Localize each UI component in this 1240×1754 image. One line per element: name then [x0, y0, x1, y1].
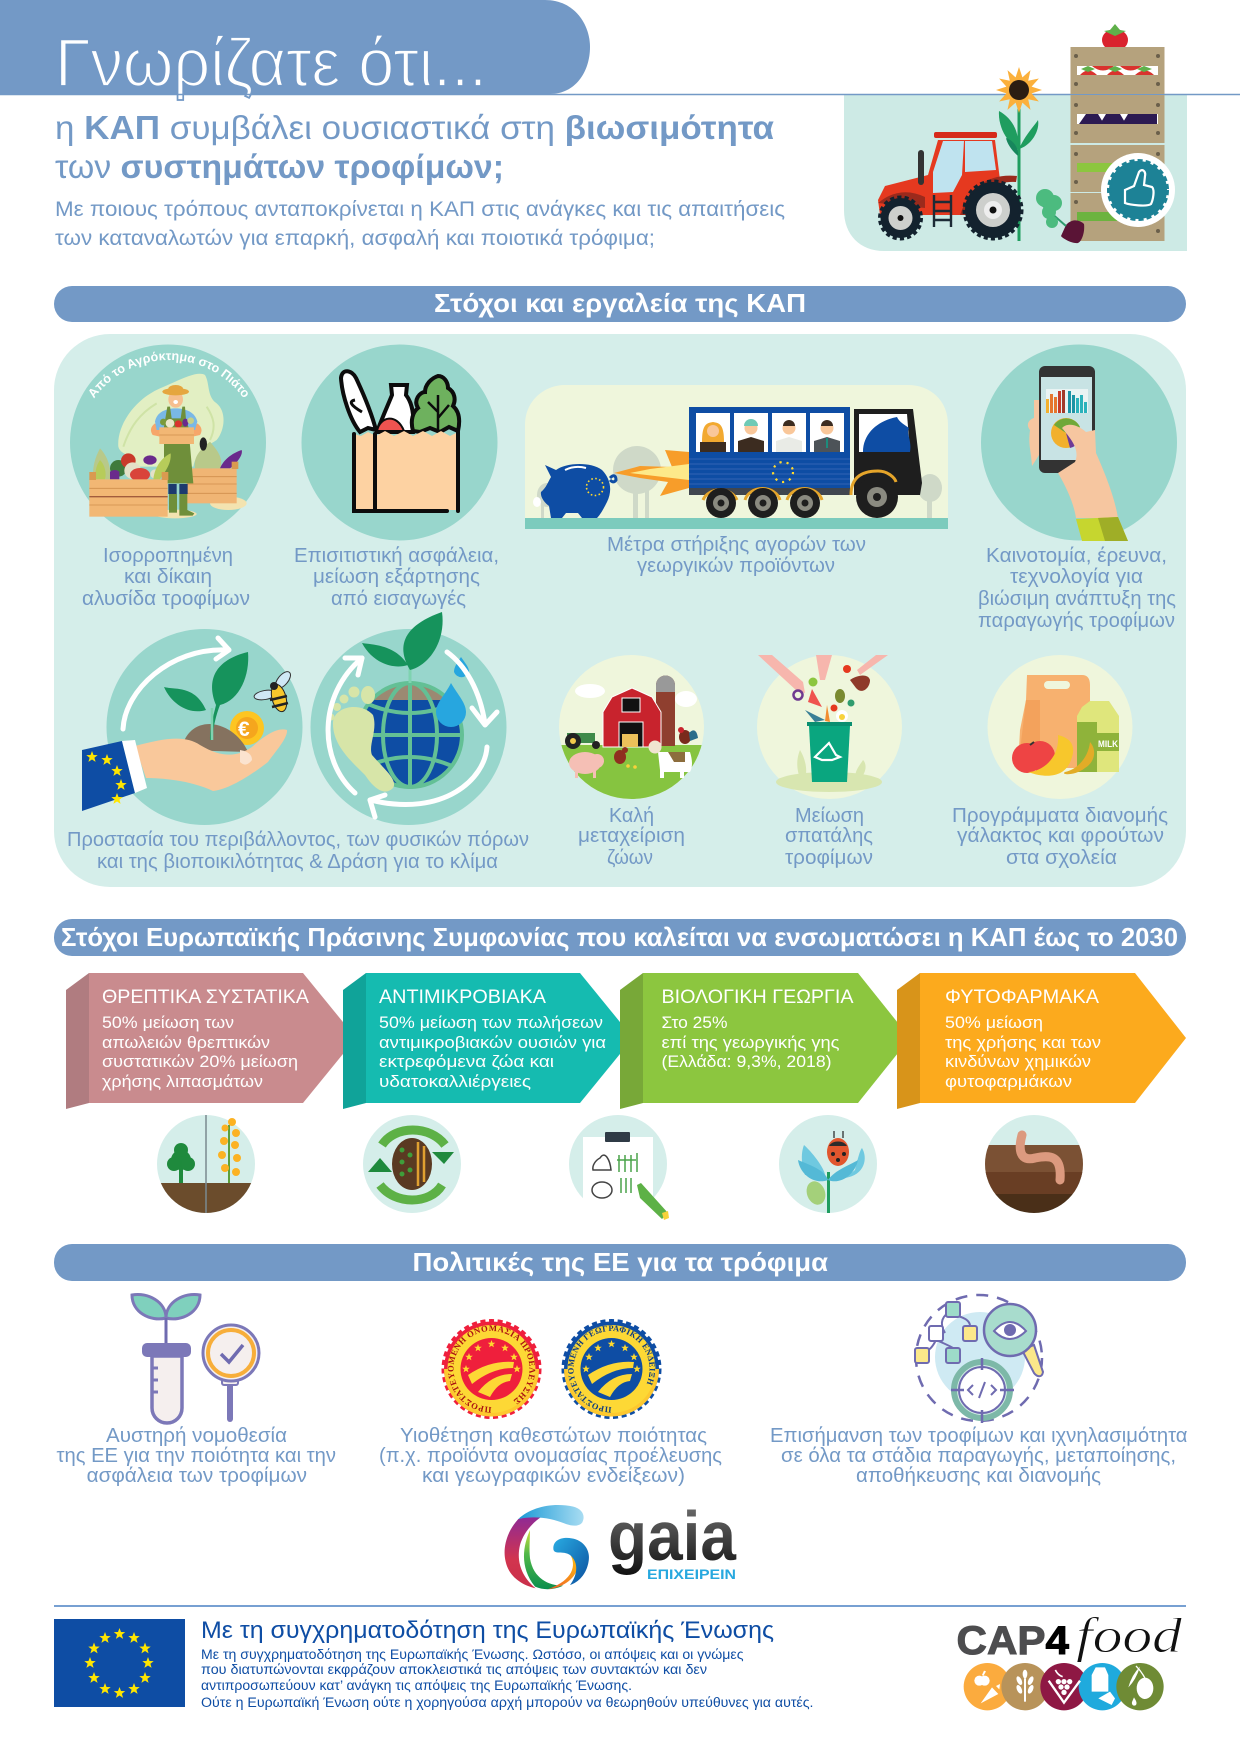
label: food security	[294, 545, 499, 610]
label: school schemes	[952, 805, 1168, 869]
label: market support: Μέτρα στήριξης αγορών των	[607, 534, 866, 556]
heading: goals and tools: Στόχοι και εργαλεία της ΚΑΠ	[434, 288, 806, 318]
heading: EU food policies	[54, 1244, 1186, 1281]
arrow: nutrients: συστατικών 20% μείωση	[102, 1052, 298, 1071]
label: animal welfare: ζώων	[607, 847, 653, 869]
icon: hand with seedling: €	[238, 718, 250, 741]
label: balanced food chain	[82, 545, 250, 610]
icon: bee	[253, 669, 293, 713]
label: quality schemes: (π.χ. προϊόντα ονομασίας προέλευσης	[379, 1445, 722, 1467]
label: food security: μείωση εξάρτησης	[313, 566, 480, 588]
label: quality schemes: και γεωγραφικών ενδείξεων)	[422, 1465, 685, 1487]
arrow: pesticides: της χρήσης και των	[945, 1033, 1101, 1052]
label: animal welfare: μεταχείριση	[578, 825, 685, 847]
icon: globe and footprint	[310, 612, 506, 825]
label: food security: Επισιτιστική ασφάλεια,	[294, 545, 499, 567]
label: strict legislation	[56, 1425, 336, 1487]
arrow: pesticides: κινδύνων χημικών	[945, 1052, 1091, 1071]
icon: cow	[648, 740, 692, 778]
arrow: antimicrobials	[343, 973, 633, 1109]
arrow: pesticides: ΦΥΤΟΦΑΡΜΑΚΑ	[945, 987, 1099, 1008]
icon: ladybird on flower	[779, 1115, 877, 1213]
label: strict legislation: ασφάλεια των τροφίμων	[87, 1465, 307, 1487]
heading: goals and tools	[54, 286, 1186, 322]
icon: piggy bank	[533, 464, 616, 518]
text: EU co-funding disclaimer: Με τη συγχρηματοδότηση της Ευρωπαϊκής Ένωσης	[201, 1617, 774, 1644]
label: school schemes: γάλακτος και φρούτων	[957, 825, 1164, 847]
icon: truck pushed by piggy bank	[525, 385, 948, 529]
label: labelling and traceability	[770, 1425, 1188, 1487]
text: EU co-funding disclaimer: Με τη συγχρηματοδότηση της Ευρωπαϊκής Ένωσης. Ωστόσο, οι απόψεις και οι γνώμες	[201, 1647, 744, 1662]
label: market support	[607, 534, 866, 577]
icon: school milk and fruit	[988, 655, 1132, 799]
icon: tractor	[565, 733, 600, 749]
logo: CAP4food: food	[1076, 1607, 1183, 1663]
label: balanced food chain: Ισορροπημένη	[103, 545, 233, 567]
subtitle: η ΚΑΠ συμβάλει ουσιαστικά στη βιωσιμότητα	[55, 109, 774, 146]
label: market support: γεωργικών προϊόντων	[637, 555, 835, 577]
icon: test tube and magnifier	[132, 1294, 259, 1423]
label: innovation: παραγωγής τροφίμων	[978, 610, 1175, 632]
arrow: antimicrobials: ΑΝΤΙΜΙΚΡΟΒΙΑΚΑ	[379, 987, 546, 1008]
icon: food waste bin	[757, 655, 902, 799]
icon: soil and crop rotation	[363, 1115, 461, 1213]
label: strict legislation: της ΕΕ για την ποιότητα και την	[56, 1445, 336, 1467]
logo: EU flag	[54, 1619, 185, 1707]
label: innovation: βιώσιμη ανάπτυξη της	[978, 588, 1176, 610]
label: balanced food chain: και δίκαιη	[124, 566, 212, 588]
label: strict legislation: Αυστηρή νομοθεσία	[106, 1425, 287, 1447]
icon: beet	[1036, 189, 1084, 243]
icon: hand with seedling	[82, 629, 302, 825]
arrow: organic farming: Στο 25%	[662, 1013, 728, 1032]
arrow: nutrients: ΘΡΕΠΤΙΚΑ ΣΥΣΤΑΤΙΚΑ	[102, 987, 309, 1008]
logo: gaia: gaia	[608, 1497, 737, 1575]
subtitle	[55, 109, 774, 185]
icon: plants and soil	[155, 1115, 257, 1215]
icon: school milk and fruit: MILK	[1098, 739, 1118, 750]
arrow: organic farming: ΒΙΟΛΟΓΙΚΗ ΓΕΩΡΓΙΑ	[662, 987, 854, 1008]
logo: CAP4food: CAP4	[956, 1619, 1070, 1663]
intro text: Με ποιους τρόπους ανταποκρίνεται η ΚΑΠ στις ανάγκες και τις απαιτήσεις	[55, 198, 785, 221]
label: school schemes: στα σχολεία	[1006, 847, 1117, 869]
label: animal welfare: Καλή	[609, 805, 654, 827]
label: animal welfare	[578, 805, 685, 869]
label: reducing food waste: τροφίμων	[785, 847, 873, 869]
illustration panel: tractor, sunflower and crate	[0, 24, 1240, 251]
logo: CAP4food	[956, 1607, 1183, 1710]
arrow: antimicrobials: υδατοκαλλιέργειες	[379, 1072, 531, 1091]
label: innovation: Καινοτομία, έρευνα,	[986, 545, 1167, 567]
arrow: nutrients: απωλειών θρεπτικών	[102, 1033, 270, 1052]
arrow: organic farming	[620, 973, 910, 1109]
icon: farm to fork: Από το Αγρόκτημα στο Πιάτο	[89, 352, 248, 398]
label: innovation	[978, 545, 1176, 632]
label: labelling and traceability: αποθήκευσης και διανομής	[856, 1465, 1101, 1487]
label: quality schemes	[379, 1425, 722, 1487]
icon: hen	[614, 747, 637, 769]
label: reducing food waste: Μείωση	[795, 805, 864, 827]
icon: grocery bag	[302, 344, 498, 540]
arrow: antimicrobials: εκτρεφόμενα ζώα και	[379, 1052, 554, 1071]
text: EU co-funding disclaimer: Ούτε η Ευρωπαϊκή Ένωση ούτε η χορηγούσα αρχή μπορούν να θεωρηθούν υπεύθυνες για αυτές.	[201, 1695, 814, 1710]
icon: PGI seal: ΠΡΟΣΤΑΤΕΥΟΜΕΝΗ ΓΕΩΓΡΑΦΙΚΗ ΕΝΔΕΙΞΗ	[568, 1326, 656, 1413]
heading: EU food policies: Πολιτικές της ΕΕ για τα τρόφιμα	[412, 1247, 828, 1277]
intro text	[55, 198, 785, 250]
label: reducing food waste	[785, 805, 873, 869]
arrow: antimicrobials: αντιμικροβιακών ουσιών για	[379, 1033, 606, 1052]
arrow: nutrients: 50% μείωση των	[102, 1013, 234, 1032]
intro text: των καταναλωτών για επαρκή, ασφαλή και ποιοτικά τρόφιμα;	[55, 227, 655, 250]
icon: traceability and labelling	[915, 1295, 1043, 1423]
icon: pig	[569, 752, 604, 778]
label: reducing food waste: σπατάλης	[785, 825, 873, 847]
label: quality schemes: Υιοθέτηση καθεστώτων ποιότητας	[400, 1425, 707, 1447]
arrow: pesticides: φυτοφαρμάκων	[945, 1072, 1072, 1091]
icon: farm and animals	[559, 655, 704, 799]
text: EU co-funding disclaimer: που διατυπώνονται εκφράζουν αποκλειστικά τις απόψεις των συντακτών και δεν	[201, 1662, 707, 1677]
title tab: Γνωρίζατε ότι...	[55, 25, 487, 101]
arrow: organic farming: επί της γεωργικής γης	[662, 1033, 840, 1052]
label: school schemes: Προγράμματα διανομής	[952, 805, 1168, 827]
icon: farm to fork	[70, 344, 266, 540]
logo: gaia	[505, 1497, 737, 1589]
label: environment and climate	[67, 829, 529, 873]
label: food security: από εισαγωγές	[331, 588, 466, 610]
icon: earthworm in soil	[984, 1115, 1086, 1216]
icon: thumbs up badge	[1101, 153, 1175, 227]
label: environment and climate: Προστασία του περιβάλλοντος, των φυσικών πόρων	[67, 829, 529, 851]
label: innovation: τεχνολογία για	[1010, 566, 1143, 588]
subtitle: των συστημάτων τροφίμων;	[55, 148, 504, 185]
label: environment and climate: και της βιοποικιλότητας & Δράση για το κλίμα	[97, 851, 498, 873]
label: labelling and traceability: Επισήμανση των τροφίμων και ιχνηλασιμότητα	[770, 1425, 1188, 1447]
text: EU co-funding disclaimer	[201, 1617, 814, 1710]
icon: clipboard with crop notes	[569, 1115, 669, 1220]
arrow: pesticides: 50% μείωση	[945, 1013, 1043, 1032]
icon: red tractor	[878, 132, 1021, 238]
arrow: nutrients: χρήσης λιπασμάτων	[102, 1072, 263, 1091]
logo: gaia: ΕΠΙΧΕΙΡΕΙΝ	[647, 1566, 736, 1582]
heading: green deal targets: Στόχοι Ευρωπαϊκής Πράσινης Συμφωνίας που καλείται να ενσωματώσει η ΚΑΠ έως το 2030	[61, 922, 1178, 952]
label: balanced food chain: αλυσίδα τροφίμων	[82, 588, 250, 610]
icon: PDO seal: ΠΡΟΣΤΑΤΕΥΟΜΕΝΗ ΟΝΟΜΑΣΙΑ ΠΡΟΕΛΕΥΣΗΣ	[448, 1325, 536, 1413]
icon: rooster	[678, 727, 698, 744]
text: EU co-funding disclaimer: αντιπροσωπεύουν κατ’ ανάγκη τις απόψεις της Ευρωπαϊκής Ένωσης.	[201, 1678, 632, 1693]
icon: hand with smartphone	[981, 344, 1177, 541]
arrow: organic farming: (Ελλάδα: 9,3%, 2018)	[662, 1052, 832, 1071]
arrow: nutrients	[66, 973, 356, 1109]
title tab	[0, 0, 590, 101]
icon: crate of vegetables	[1070, 24, 1164, 241]
label: labelling and traceability: σε όλα τα στάδια παραγωγής, μεταποίησης,	[781, 1445, 1176, 1467]
arrow: antimicrobials: 50% μείωση των πωλήσεων	[379, 1013, 603, 1032]
arrow: pesticides	[897, 973, 1186, 1109]
panel: goals and tools	[54, 334, 1186, 887]
icon: sunflower	[996, 67, 1042, 241]
